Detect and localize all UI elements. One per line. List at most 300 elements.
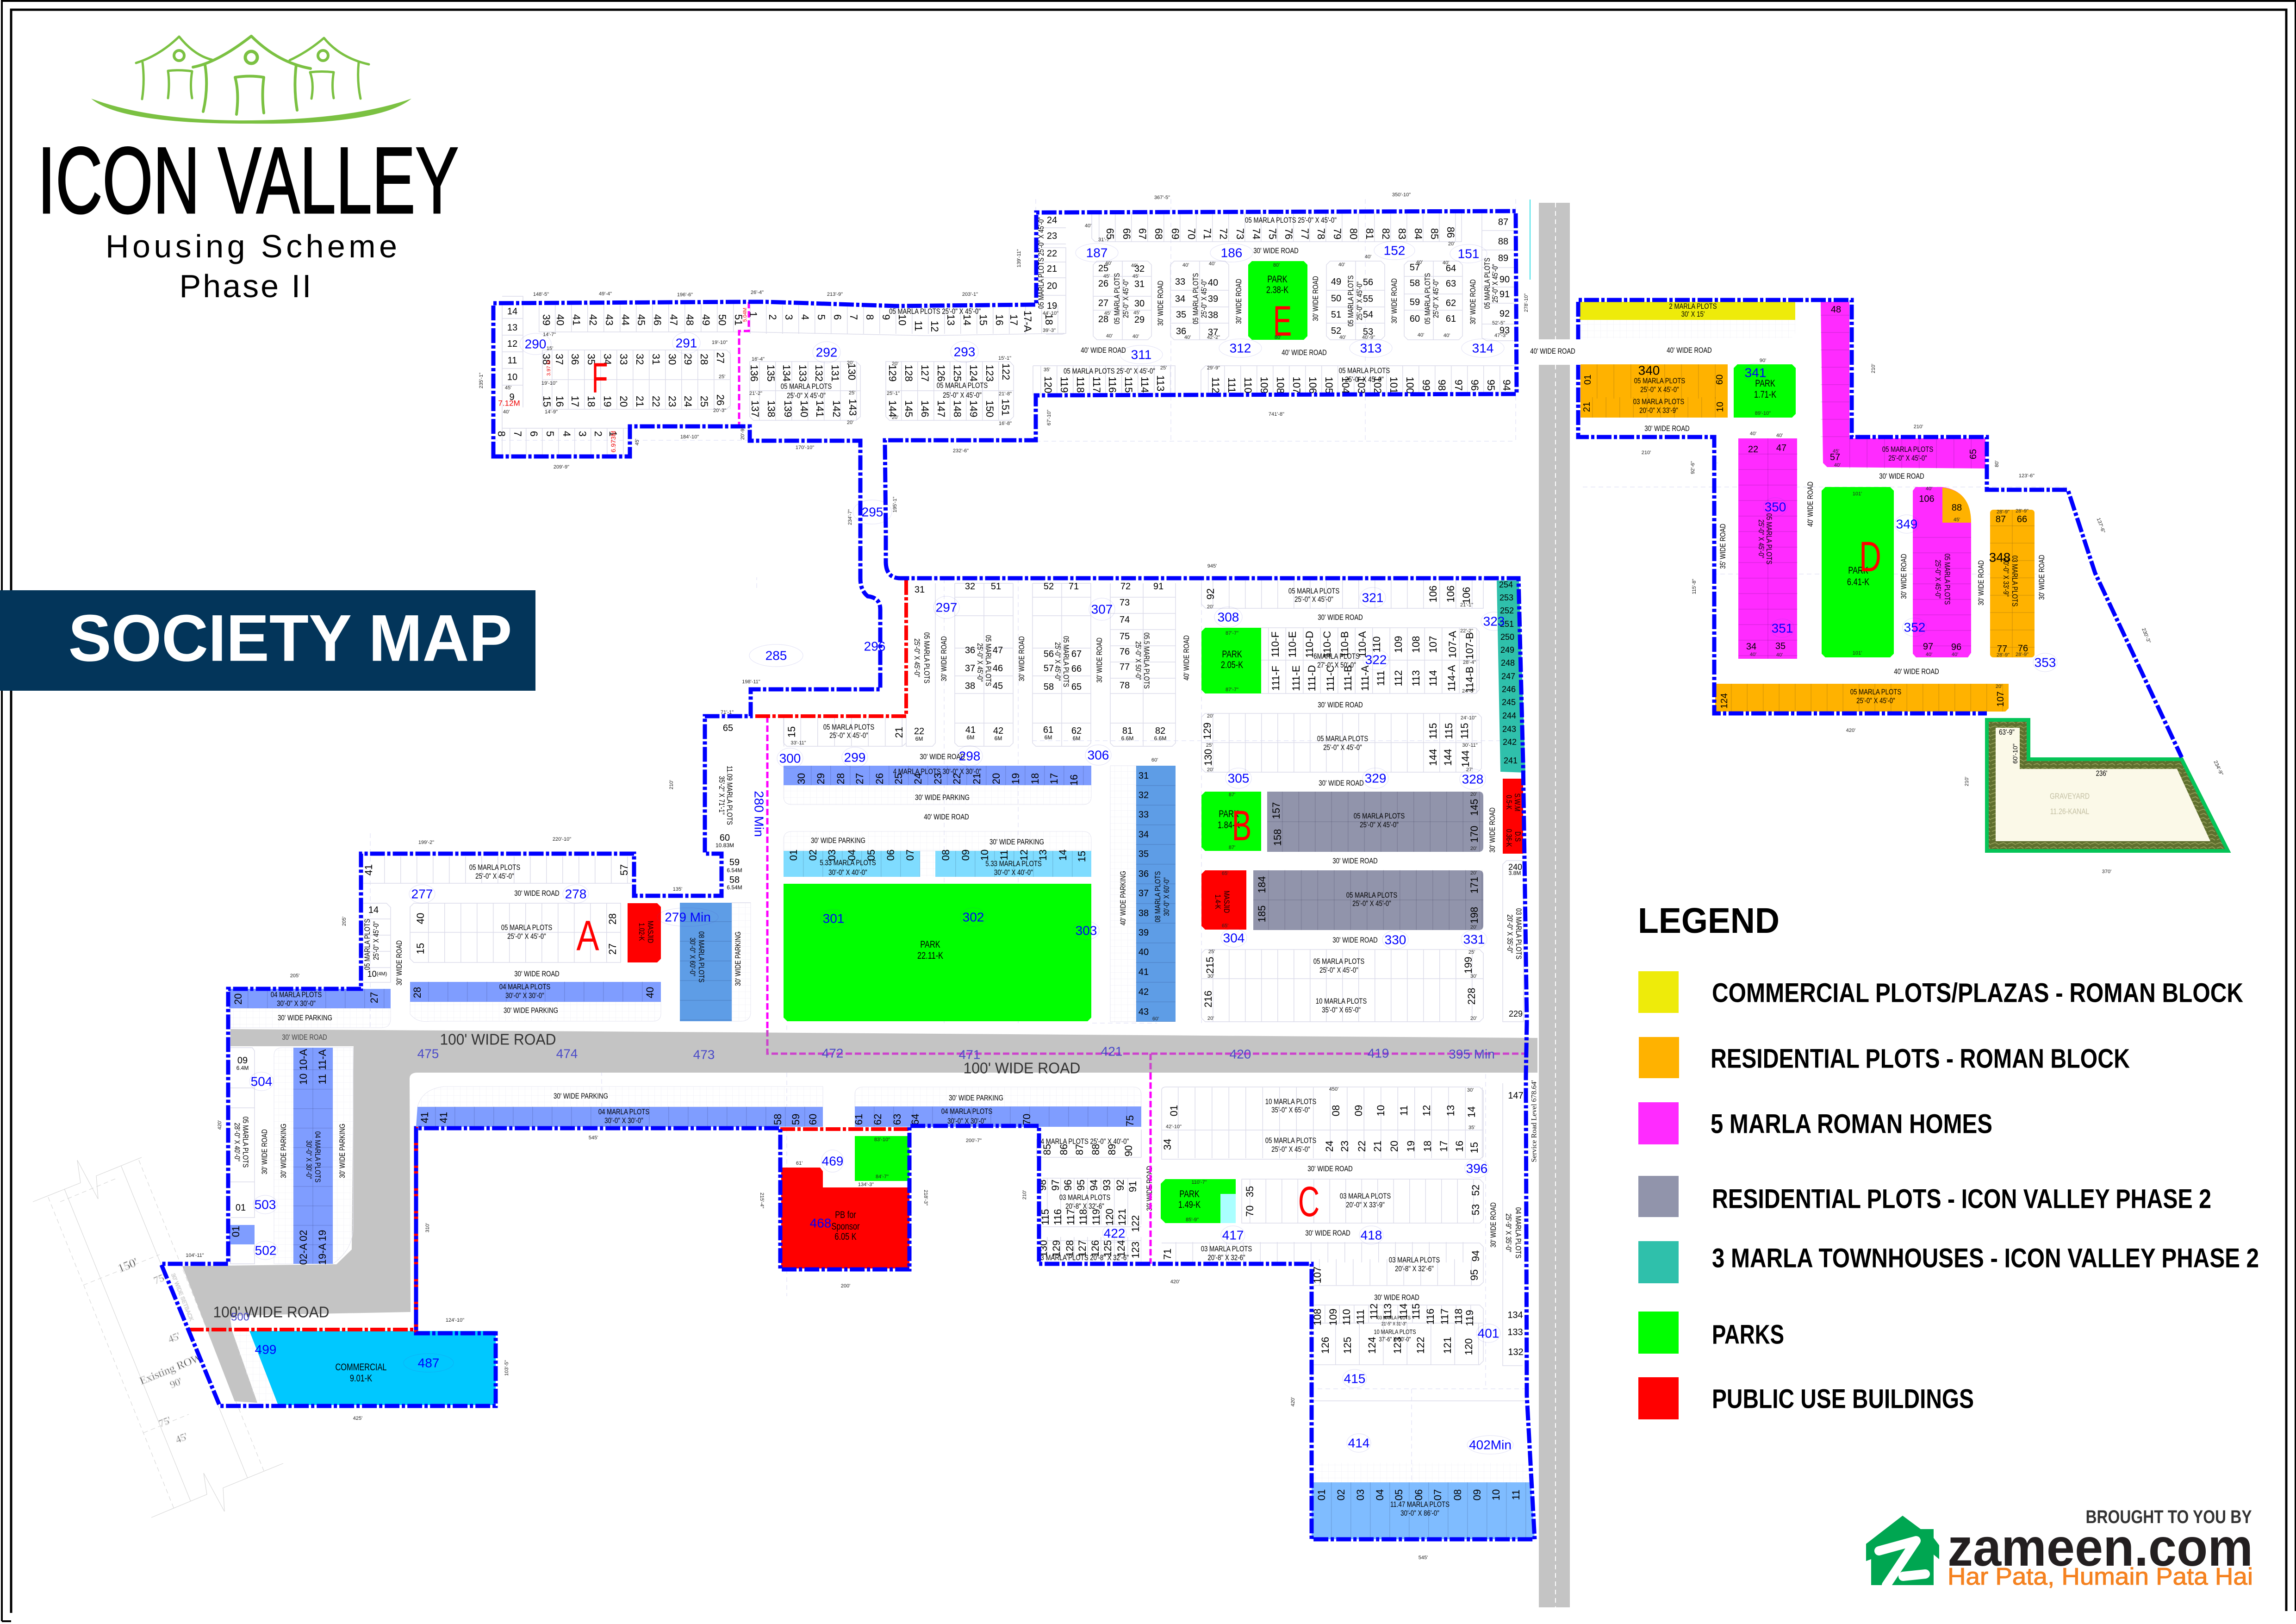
central upright numbers: 75: [1120, 631, 1130, 642]
block C rotated numbers: 116: [1052, 1209, 1064, 1225]
central upright numbers: 3.8M: [1509, 870, 1521, 876]
central rotated numbers reading up: 158: [1272, 829, 1283, 846]
central rotated numbers reading up: 107: [1427, 636, 1438, 653]
legend item: 5 marla homes: [1638, 1102, 1992, 1144]
block F rotated plot numbers: 18: [586, 396, 597, 407]
block A labels: 9.01-K: [350, 1373, 373, 1384]
plot dimension labels inside blocks: 30': [1467, 1087, 1474, 1093]
block A labels: 30'-0" X 30'-0": [277, 999, 316, 1008]
block C rotated numbers: 123: [1129, 1242, 1141, 1258]
central horizontal labels: 30' WIDE ROAD: [1318, 613, 1363, 622]
section numbers: 468: [810, 1216, 831, 1230]
central upright numbers: 38: [1139, 908, 1149, 918]
block E rotated plot numbers: 114: [1139, 376, 1151, 393]
block F rotated plot numbers: 151: [1000, 399, 1012, 416]
block E rotated plot numbers: 85: [1429, 228, 1440, 239]
right-of-way labels: 75': [152, 1271, 168, 1286]
central rotated numbers reading up: 144: [1460, 750, 1471, 767]
central rotated numbers reading up: 111-E: [1290, 665, 1301, 691]
orange plots 124 to 107: [1715, 684, 2009, 712]
park B: [1201, 792, 1261, 851]
block A rotated labels reading up: [261, 919, 742, 1178]
central upright numbers: 47: [993, 645, 1003, 656]
block A rotated labels reading down: 04 MARLA PLOTS: [313, 1131, 322, 1182]
plot dimension labels inside blocks: 24'-6": [1462, 688, 1475, 694]
block C labels: 30' WIDE PARKING: [949, 1094, 1003, 1102]
central rotated numbers reading up: 14: [1057, 849, 1068, 861]
08 marla column: [1136, 766, 1176, 1022]
block E rotated plot numbers: 80: [1348, 228, 1360, 239]
block F rotated plot numbers: 137: [750, 400, 761, 417]
block A rotated numbers: 02: [297, 1230, 309, 1241]
plot dimension labels inside blocks: 84'-7": [876, 1174, 889, 1180]
block D horizontal labels: 05 MARLA PLOTS: [1850, 688, 1901, 696]
block F rotated plot numbers: 17: [1008, 314, 1020, 325]
plot dimension labels inside blocks: 61': [796, 1161, 803, 1166]
section numbers: 298: [959, 749, 980, 763]
central horizontal labels: 1.84-K: [1218, 819, 1240, 831]
block C rotated numbers: 108: [1312, 1309, 1323, 1325]
plot dimension labels inside blocks: 25': [1160, 365, 1167, 371]
section numbers: 277: [411, 887, 433, 901]
block C rotated labels: [1145, 1166, 1498, 1248]
block F rotated plot numbers: 48: [684, 314, 696, 325]
block C rotated numbers: 94: [1470, 1250, 1481, 1262]
central rotated labels reading up: 30' WIDE ROAD: [1018, 636, 1026, 681]
dimension labels: 278'-10": [1524, 294, 1529, 312]
plot dimension labels inside blocks: 15': [547, 346, 553, 351]
block E upright plot numbers: 89: [1498, 253, 1508, 263]
block E rotated plot numbers: 110: [1242, 377, 1254, 394]
central upright numbers: 82: [1155, 726, 1165, 736]
block C rotated labels: 30' WIDE ROAD: [1489, 1202, 1498, 1248]
block D rotated labels reading up: 10: [1715, 402, 1725, 412]
central rotated numbers reading up: 110-E: [1287, 631, 1298, 658]
plot dimension labels inside blocks: 40': [1952, 652, 1958, 657]
block F rotated plot numbers: 16: [994, 314, 1005, 325]
park C: [1161, 1179, 1236, 1223]
block D horizontal labels: PARK: [1755, 378, 1775, 389]
central horizontal labels: 05 MARLA PLOTS: [1288, 587, 1339, 595]
block E horizontal labels: 30' WIDE ROAD: [1253, 247, 1299, 255]
block F rotated plot numbers: 31: [651, 354, 662, 365]
plot dimension labels inside blocks: 40': [1418, 332, 1424, 338]
plot dimension labels inside blocks: 27': [1466, 767, 1473, 773]
block D rotated labels reading up: 40' WIDE ROAD: [1806, 481, 1815, 527]
central rotated numbers reading up: 28: [835, 773, 846, 784]
central upright numbers: 58: [729, 875, 740, 885]
block D horizontal labels: 25'-0" X 45'-0": [1888, 454, 1927, 462]
block C labels: 25'-0" X 45'-0": [1271, 1145, 1310, 1154]
block F plot labels: [546, 307, 988, 452]
plot dimension labels inside blocks: 25': [1468, 949, 1475, 955]
central rotated numbers reading up: 114: [1427, 670, 1438, 687]
legend: [1638, 901, 2259, 1419]
central rotated numbers reading up: 130: [1202, 749, 1213, 766]
block C rotated numbers: 11: [1510, 1490, 1522, 1500]
magenta homes 350 and 351: [1738, 438, 1797, 659]
central rotated numbers reading up: 08: [940, 849, 952, 861]
plot dimension labels inside blocks: 30'-11": [1462, 743, 1478, 748]
block F rotated plot numbers: 143: [847, 399, 859, 416]
section numbers: 504: [251, 1074, 272, 1089]
block C rotated numbers: 115: [1410, 1303, 1422, 1320]
block C labels: 03 MARLA PLOTS: [1201, 1245, 1252, 1253]
block F rotated plot numbers: 44: [620, 314, 631, 325]
townhouses teal: [1497, 581, 1525, 773]
central upright numbers: 229: [1509, 1009, 1523, 1018]
orange plots 340: [1580, 364, 1728, 418]
block D horizontal labels: 2 MARLA PLOTS: [1669, 302, 1717, 311]
masjid A: [628, 903, 661, 962]
block A rotated labels reading up: 30' WIDE PARKING: [280, 1124, 288, 1178]
plot dimension labels inside blocks: 20': [892, 415, 898, 420]
block F rotated plot numbers: 8: [865, 314, 876, 320]
block A labels: 30' WIDE ROAD: [514, 970, 560, 978]
central rotated numbers reading up: 110-D: [1303, 631, 1315, 658]
central horizontal labels: 30' WIDE PARKING: [915, 793, 970, 802]
plot dimension labels inside blocks: 20': [847, 360, 853, 366]
plot dimension labels inside blocks: 40': [1776, 433, 1783, 438]
block F rotated plot numbers: 15: [977, 314, 989, 325]
section numbers: 351: [1772, 621, 1793, 635]
block C rotated numbers: 87: [1074, 1144, 1085, 1155]
block F rotated plot numbers: 149: [968, 400, 979, 417]
section numbers: 296: [864, 639, 885, 654]
park D: [1822, 487, 1894, 657]
block C rotated numbers: 124: [1366, 1337, 1377, 1354]
block E rotated plot numbers: 94: [1501, 380, 1512, 391]
block F rotated plot numbers: 12: [929, 321, 940, 332]
block A rotated numbers: 11: [317, 1074, 328, 1084]
block D rotated labels reading up: 30' WIDE ROAD: [1900, 554, 1908, 599]
section numbers: 304: [1223, 931, 1244, 945]
park 308: [1201, 628, 1261, 693]
block A numbers upright: [236, 905, 387, 1213]
block E upright plot numbers: 30: [1134, 299, 1145, 309]
block F rotated plot numbers: 126: [936, 365, 947, 381]
block E plots and labels: [1033, 212, 1575, 395]
dimension labels: 232'-6": [953, 448, 969, 454]
central rotated labels reading down: 05.5 MARLA PLOTS: [1142, 632, 1151, 689]
block C labels: 03 MARLA PLOTS: [1377, 1315, 1411, 1321]
central rotated numbers reading up: 30: [795, 773, 807, 784]
plot dimension labels inside blocks: 20': [892, 361, 898, 367]
dimension labels: 210': [1642, 450, 1651, 456]
central upright numbers: 35: [1139, 849, 1149, 859]
dimension labels: 367'-5": [1154, 195, 1170, 200]
block E rotated plot numbers: 111: [1226, 377, 1238, 393]
block F rotated plot numbers: 17: [569, 396, 581, 407]
block C labels: 20'-8" X 32'-6": [1065, 1202, 1104, 1211]
dimension labels: 220'-10": [553, 837, 571, 842]
right-of-way labels: 30' WIDE SETBACK: [170, 1273, 195, 1322]
plot dimension labels inside blocks: 28'-9": [2016, 508, 2028, 514]
block C rotated numbers: 08: [1330, 1105, 1341, 1116]
central rotated numbers reading up: 07: [904, 849, 915, 861]
central upright numbers: 37: [1139, 888, 1149, 899]
block E upright plot numbers: 24: [1047, 215, 1057, 225]
block A rotated numbers: 28: [606, 913, 618, 924]
dimension labels: 425': [353, 1416, 362, 1421]
block F plot labels: 6.973M: [610, 431, 617, 452]
block E upright plot numbers: 32: [1134, 264, 1145, 274]
block C labels: 30' WIDE ROAD: [1305, 1229, 1350, 1237]
central upright numbers: 253: [1500, 593, 1513, 602]
block A labels: 25'-0" X 45'-0": [475, 872, 514, 881]
section numbers: 299: [844, 750, 865, 765]
block E upright plot numbers: 27: [1098, 298, 1108, 308]
5.33 marla strips: [784, 851, 920, 877]
block E rotated plot numbers: 84: [1412, 228, 1425, 239]
block A numbers upright: 14: [368, 905, 379, 915]
plot dimension labels inside blocks: 40': [1926, 486, 1932, 492]
plot dimension labels inside blocks: 40': [1085, 223, 1091, 229]
central upright numbers: 254: [1499, 580, 1513, 589]
block E upright plot numbers: 51: [1331, 310, 1341, 320]
block F rotated plot numbers: 49: [701, 314, 712, 325]
block C rotated numbers: 117: [1064, 1209, 1076, 1225]
block C rotated numbers: 122: [1414, 1337, 1426, 1354]
block F rotated plot numbers: 50: [716, 314, 728, 325]
graveyard: 60'-10": [2011, 743, 2019, 764]
dimension labels: 420': [1290, 1397, 1296, 1406]
plot dimension labels inside blocks: 40': [1776, 652, 1783, 658]
central horizontal labels: 30' WIDE ROAD: [1332, 857, 1378, 865]
plot dimension labels inside blocks: 45': [1133, 310, 1140, 316]
central rotated numbers reading up: 107-A: [1447, 631, 1458, 658]
section numbers: 503: [255, 1197, 276, 1212]
logo: three green houses on a swoosh: [91, 36, 411, 124]
masjid: [1201, 870, 1246, 930]
block C labels: 04 MARLA PLOTS: [941, 1107, 992, 1116]
block C rotated labels reading down: 04 MARLA PLOTS: [1514, 1207, 1522, 1258]
block E upright plot numbers: 29: [1134, 315, 1145, 325]
block E upright plot numbers: 25: [1098, 263, 1108, 274]
legend heading: LEGEND: [1638, 901, 1780, 941]
block E rotated plot numbers: 83: [1397, 228, 1408, 239]
block F rotated plot numbers: 145: [903, 400, 915, 417]
block C rotated numbers: 96: [1062, 1180, 1074, 1191]
central upright numbers: 6M: [915, 736, 923, 742]
central upright numbers: 243: [1502, 725, 1516, 734]
block C rotated numbers: 70: [1244, 1206, 1255, 1217]
section numbers: 352: [1904, 620, 1925, 634]
block C rotated numbers: 127: [1076, 1240, 1088, 1257]
plot dimension labels inside blocks: 45': [1103, 274, 1110, 279]
wide road labels: 100' WIDE ROAD: [964, 1059, 1080, 1077]
plot dimension labels inside blocks: 87'-7": [1226, 631, 1238, 636]
plot dimension labels inside blocks: 28'-9": [1997, 509, 2010, 515]
block A rotated numbers: 19-A: [317, 1243, 328, 1265]
section numbers: 472: [822, 1046, 843, 1060]
block F rotated plot numbers: 39: [541, 314, 553, 325]
block E rotated labels: 05 MARLA PLOTS: [1113, 273, 1121, 324]
central upright numbers: 10.83M: [716, 842, 734, 849]
dimension labels: 234'-7": [847, 509, 853, 525]
wide road labels: 100' WIDE ROAD: [440, 1031, 556, 1048]
dimension labels: 210': [1964, 777, 1970, 786]
block E rotated plot numbers: 108: [1275, 377, 1287, 394]
dimension labels: 234'-9": [2212, 760, 2224, 776]
central rotated labels reading down: 05 MARLA PLOTS: [984, 635, 992, 686]
block A rotated labels reading up: 30' WIDE PARKING: [338, 1124, 347, 1178]
block F plot labels: 05 MARLA PLOTS: [937, 381, 988, 390]
block E rotated labels: 30' WIDE ROAD: [1157, 281, 1165, 326]
block C rotated numbers: 119: [1463, 1310, 1475, 1326]
block E upright plot numbers: 62: [1446, 298, 1456, 308]
central rotated labels reading down: 0.5-K: [1505, 795, 1513, 810]
block D numbers: 47: [1776, 443, 1786, 453]
block F rotated plot numbers: 1: [607, 431, 619, 437]
plot dimension labels inside blocks: 14'-7": [543, 332, 556, 337]
central horizontal labels: 30' WIDE ROAD: [920, 753, 965, 761]
block A rotated numbers: 41: [363, 864, 374, 875]
block E upright plot numbers: 37: [1208, 327, 1218, 337]
block E rotated plot numbers: 96: [1469, 380, 1481, 391]
block C rotated numbers: 124: [1115, 1240, 1126, 1257]
block F rotated plot numbers: 134: [781, 365, 792, 381]
section numbers: 323: [1483, 614, 1505, 629]
block E upright plot numbers: 91: [1500, 289, 1510, 300]
block E rotated plot numbers: 98: [1437, 380, 1448, 391]
block D rotated labels reading down: [1757, 513, 2019, 606]
section numbers: 419: [1368, 1046, 1389, 1060]
central upright numbers: 42: [993, 726, 1003, 736]
central upright numbers: 57: [1044, 663, 1054, 674]
block E upright plot numbers: 23: [1047, 231, 1057, 241]
block F rotated plot numbers: 123: [984, 365, 996, 381]
block C rotated numbers: 88: [1089, 1144, 1101, 1155]
block C rotated numbers: 121: [1116, 1209, 1127, 1225]
legend item: residential phase 2: RESIDENTIAL PLOTS - ICON VALLEY PHASE 2: [1712, 1184, 2211, 1214]
block F left column numbers: 11: [508, 356, 517, 366]
block C labels: 03 MARLA PLOTS: [1340, 1192, 1391, 1200]
block D rotated labels reading up: 30' WIDE ROAD: [1977, 560, 1985, 606]
block D numbers: 34: [1746, 642, 1756, 652]
park 341: [1734, 364, 1796, 418]
section numbers: 306: [1088, 748, 1109, 762]
central upright numbers: 33: [1139, 810, 1149, 820]
plot dimension labels inside blocks: 28'-9": [2016, 652, 2028, 657]
public use red sponsor plot: [781, 1168, 909, 1268]
block E rotated labels: 25'-0" X 45'-0": [1432, 279, 1440, 318]
block C rotated numbers: 70: [1021, 1114, 1032, 1125]
block E rotated plot numbers: 69: [1170, 228, 1181, 239]
plot dimension labels inside blocks: 40': [1444, 333, 1450, 338]
block F rotated plot numbers: 46: [652, 314, 664, 325]
plot dimension labels inside blocks: 45': [1104, 311, 1111, 316]
block F rotated plot numbers: 138: [765, 400, 778, 417]
block C rotated numbers: 121: [1441, 1337, 1453, 1354]
plot dimension labels inside blocks: 101': [1853, 650, 1862, 656]
block F rotated plot numbers: 32: [634, 354, 646, 365]
block E rotated plot numbers: 99: [1421, 380, 1432, 391]
central rotated labels reading down: 25'-0" X 45'-0": [913, 638, 921, 677]
left plot column near 504: [230, 1048, 255, 1264]
block F rotated plot numbers: 29: [682, 354, 694, 365]
block A rotated numbers: 01: [230, 1226, 242, 1237]
central rotated numbers reading up: 09: [960, 849, 971, 861]
block F rotated plot numbers: 18: [1043, 314, 1055, 325]
section numbers: 312: [1230, 341, 1251, 356]
commercial plots yellow: [1580, 302, 1795, 320]
central horizontal labels: 30' WIDE ROAD: [1318, 701, 1363, 709]
block F rotated plot numbers: 26: [715, 394, 727, 406]
block A rotated numbers: 57: [618, 864, 629, 875]
block F rotated plot numbers: 20: [618, 396, 629, 407]
icon: zameen house: [1866, 1516, 1939, 1585]
central rotated labels reading up: 40' WIDE PARKING: [1119, 871, 1127, 925]
block E rotated labels: 05 MARLA PLOTS: [1424, 273, 1432, 324]
block C rotated numbers: 130: [1038, 1240, 1049, 1257]
block D horizontal labels: [1633, 302, 1939, 705]
right-of-way labels: [116, 1255, 204, 1445]
central horizontal labels: 05 MARLA PLOTS: [1317, 735, 1368, 743]
block E upright plot numbers: 56: [1363, 277, 1373, 287]
central upright numbers: 74: [1120, 615, 1130, 625]
block D numbers: 97: [1923, 642, 1933, 652]
central rotated labels reading up: 30'-0" X 60'-0": [1163, 877, 1171, 916]
central upright numbers: 71: [1069, 581, 1079, 592]
block C labels: 30'-0" X 86'-0": [1400, 1509, 1439, 1518]
parking panels: [230, 1002, 1141, 1264]
section numbers: 290: [525, 337, 546, 351]
central rotated numbers reading up: 215: [1204, 957, 1215, 974]
plot dimension labels inside blocks: 40': [1105, 261, 1112, 266]
central rotated numbers reading up: 04: [846, 849, 857, 861]
block F rotated plot numbers: 2: [592, 431, 604, 437]
block E horizontal labels: 05 MARLA PLOTS: [1339, 367, 1390, 375]
central rotated labels reading up: [940, 635, 1497, 925]
block F rotated plot numbers: 147: [936, 400, 947, 417]
block D rotated labels reading up: 60: [1715, 375, 1725, 385]
plot dimension labels inside blocks: 52'-5": [1492, 320, 1505, 326]
block E horizontal labels: 40' WIDE ROAD: [1530, 347, 1575, 356]
section numbers: 331: [1463, 932, 1485, 946]
brought to you by: BROUGHT TO YOU BY: [2085, 1507, 2252, 1527]
central upright numbers: 77: [1120, 662, 1130, 672]
plot dimension labels inside blocks: 20': [847, 420, 853, 425]
block F rotated plot numbers: 5: [544, 431, 556, 437]
plot dimension labels inside blocks: 16'-8": [999, 421, 1012, 426]
block E rotated plot numbers: 119: [1059, 376, 1070, 393]
central upright numbers: 52: [1044, 581, 1054, 592]
block E rotated plot numbers: 71: [1201, 228, 1213, 239]
block C labels: 37'-6" X 60'-0": [1379, 1336, 1411, 1343]
block E upright plot numbers: 63: [1446, 279, 1456, 289]
central rotated labels reading down: 35'-2" X 71'-1": [717, 776, 726, 815]
central upright numbers: 34: [1139, 830, 1149, 840]
block A labels: 30'-0" X 30'-0": [505, 992, 544, 1000]
plot dimension labels inside blocks: 87': [1229, 845, 1235, 850]
central rotated numbers reading up: 13: [1037, 849, 1049, 861]
zameen.com branding: [1866, 1507, 2253, 1590]
block D horizontal labels: 25'-0" X 45'-0": [1856, 697, 1895, 705]
dimension labels: 195'-1": [892, 497, 898, 512]
block C rotated numbers: 05: [1393, 1489, 1404, 1500]
block D rotated labels reading down: 25'-0" X 45'-0": [1757, 519, 1765, 558]
block E rotated plot numbers: 70: [1186, 228, 1198, 239]
block A labels: 25'-0" X 45'-0": [507, 932, 546, 941]
central horizontal labels: PARK: [1219, 808, 1239, 819]
central rotated numbers reading up: 12: [1018, 849, 1029, 861]
block C rotated numbers: 111: [1354, 1309, 1366, 1325]
central rotated numbers reading up: 144: [1442, 749, 1453, 766]
block E upright plot numbers: 36: [1176, 326, 1186, 337]
plot dimension labels inside blocks: 42'-10": [1166, 1124, 1182, 1130]
block C rotated numbers: 117: [1438, 1308, 1450, 1325]
